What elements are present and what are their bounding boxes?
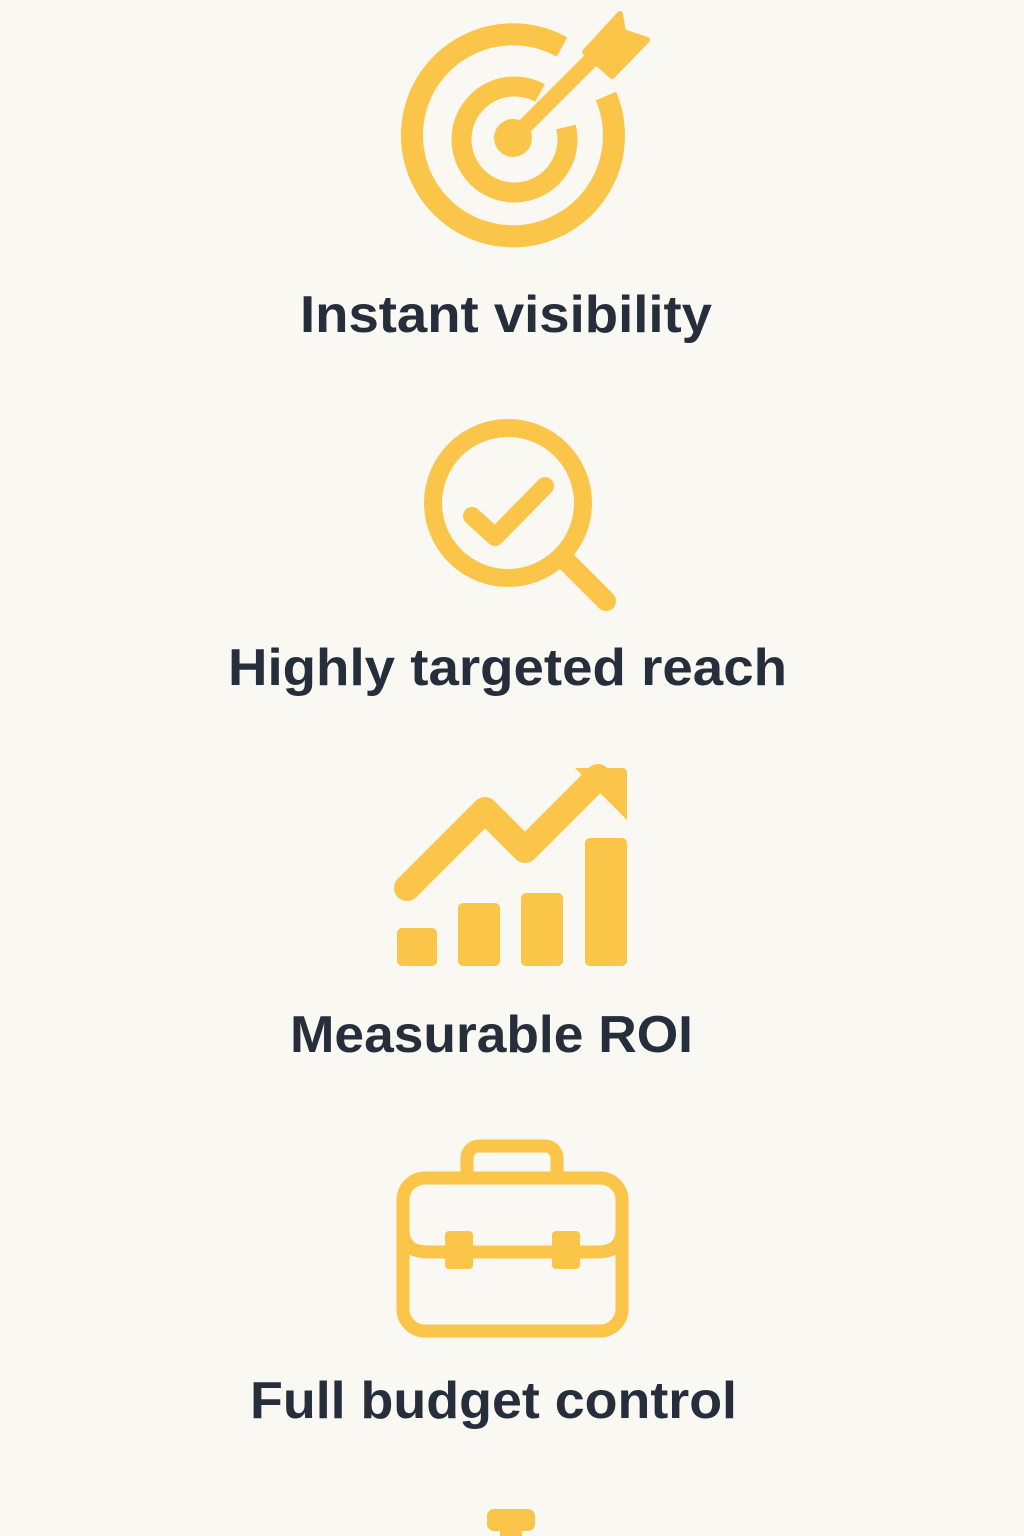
icon: briefcase [403, 1146, 622, 1331]
heading: Full budget control: Full budget control [250, 1372, 737, 1430]
icon: target with arrow [412, 14, 647, 236]
heading: Highly targeted reach: Highly targeted reach [228, 639, 787, 697]
icon: growth chart [397, 768, 627, 966]
icon: magnifier with check [433, 428, 606, 601]
icon: partial bottom icon [487, 1509, 535, 1536]
heading: Instant visibility: Instant visibility [300, 286, 712, 344]
heading: Measurable ROI: Measurable ROI [290, 1006, 693, 1064]
